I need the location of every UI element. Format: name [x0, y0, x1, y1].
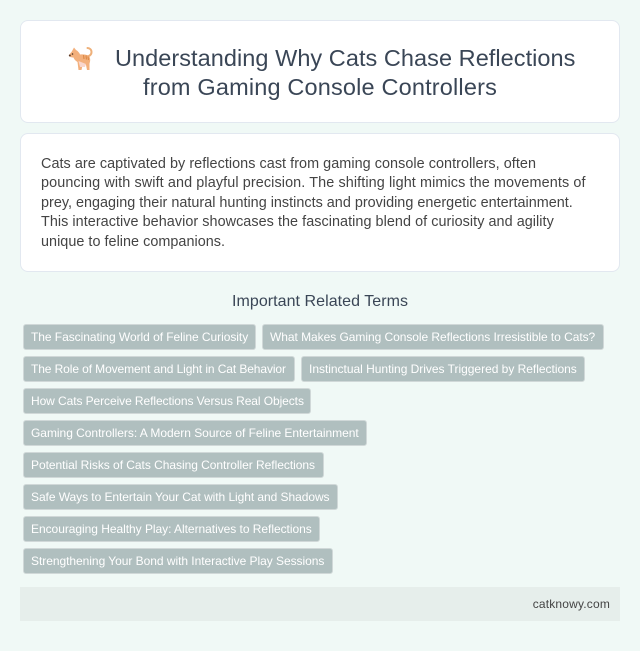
footer source text: catknowy.com — [533, 597, 610, 611]
tag list — [23, 324, 604, 574]
tag — [23, 452, 324, 478]
tag — [23, 516, 320, 542]
tag: Instinctual Hunting Drives Triggered by Reflections — [309, 362, 577, 376]
heading: important related terms: Important Related Terms — [232, 293, 408, 310]
tag — [301, 356, 585, 382]
footer bar — [20, 587, 620, 621]
tag: What Makes Gaming Console Reflections Irresistible to Cats? — [270, 330, 595, 344]
panel: title card — [20, 20, 620, 123]
title: Understanding Why Cats Chase Reflections — [115, 45, 575, 71]
panel: description card — [20, 133, 620, 272]
tag — [23, 548, 333, 574]
description text — [41, 156, 586, 250]
tag: Safe Ways to Entertain Your Cat with Light and Shadows — [31, 490, 330, 504]
tag: How Cats Perceive Reflections Versus Real Objects — [31, 394, 304, 408]
tag: Encouraging Healthy Play: Alternatives to Reflections — [31, 522, 312, 536]
description text: Cats are captivated by reflections cast from gaming console controllers, often — [41, 156, 536, 172]
tag — [23, 324, 256, 350]
tag: Strengthening Your Bond with Interactive Play Sessions — [31, 554, 324, 568]
title — [115, 45, 575, 100]
tag — [262, 324, 604, 350]
tag — [23, 484, 338, 510]
tag — [23, 388, 311, 414]
tag — [23, 356, 295, 382]
tag — [23, 420, 367, 446]
title: from Gaming Console Controllers — [143, 74, 497, 100]
description text: prey, engaging their natural hunting instincts and providing energetic entertainment. — [41, 195, 573, 211]
tag: Gaming Controllers: A Modern Source of Feline Entertainment — [31, 426, 359, 440]
tag: The Fascinating World of Feline Curiosity — [31, 330, 248, 344]
icon: orange cat — [68, 47, 92, 70]
description text: unique to feline companions. — [41, 234, 225, 250]
tag: Potential Risks of Cats Chasing Controller Reflections — [31, 458, 315, 472]
description text: This interactive behavior showcases the fascinating blend of curiosity and agility — [41, 214, 554, 230]
description text: pouncing with swift and playful precision. The shifting light mimics the movements of — [41, 175, 586, 191]
tag: The Role of Movement and Light in Cat Behavior — [31, 362, 286, 376]
